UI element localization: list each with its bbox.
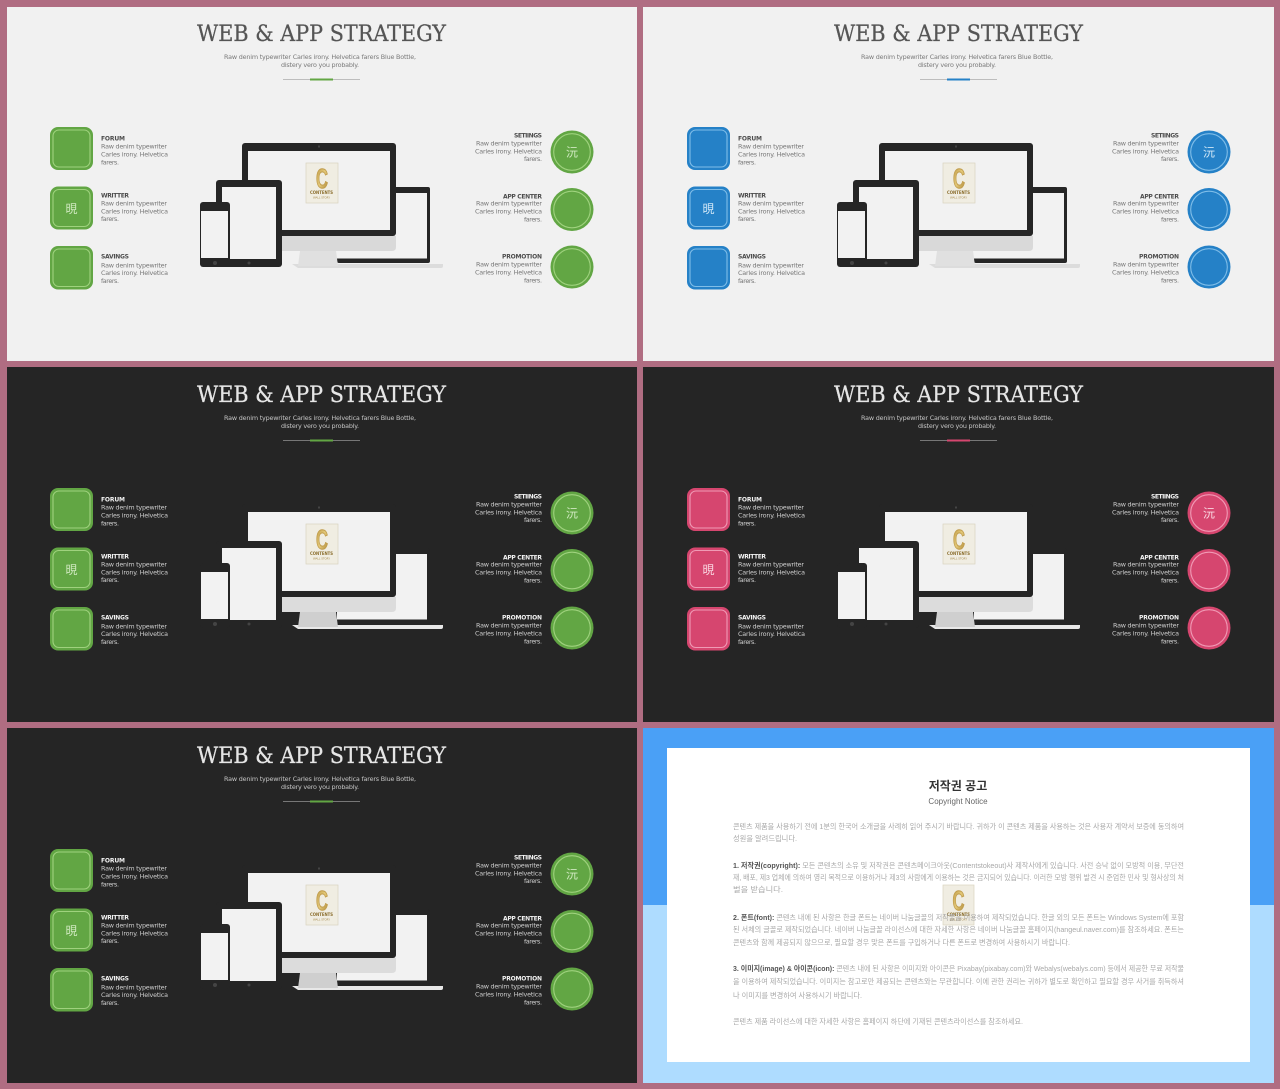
icon: settings: 沅 bbox=[1203, 506, 1215, 520]
subtitle bbox=[224, 775, 416, 791]
subtitle: distery vero you probably. bbox=[281, 422, 359, 430]
logo: C bbox=[316, 524, 328, 555]
logo bbox=[943, 163, 975, 203]
subtitle: distery vero you probably. bbox=[281, 783, 359, 791]
subtitle: distery vero you probably. bbox=[281, 61, 359, 69]
text: savings: SAVINGS bbox=[738, 614, 766, 622]
text: app center bbox=[475, 554, 542, 584]
logo: WALL STORY bbox=[313, 918, 330, 922]
text: forum: Carles irony. Helvetica bbox=[101, 872, 168, 880]
text: settings bbox=[475, 494, 542, 524]
text: writter: Raw denim typewriter bbox=[101, 922, 167, 930]
text: writter: Carles irony. Helvetica bbox=[101, 930, 168, 938]
heading: WEB & APP STRATEGY bbox=[197, 22, 446, 47]
text: savings: Carles irony. Helvetica bbox=[101, 991, 168, 999]
logo: WALL STORY bbox=[950, 556, 967, 560]
text: promotion bbox=[475, 976, 542, 1006]
icon: settings bbox=[1188, 130, 1230, 174]
subtitle: Raw denim typewriter Carles irony. Helvetica farers Blue Bottle, bbox=[861, 53, 1053, 61]
text: forum: farers. bbox=[738, 520, 756, 528]
device mockup bbox=[200, 504, 443, 629]
section: copyright: 재, 배포, 제3 업체에 의하여 영리 목적으로 이용하거나 제3의 사람에게 이용하는 것은 금지되어 있습니다. 이러한 모방 행위 발견 시 준엄한 민사 및 형사상의 처 bbox=[733, 873, 1184, 882]
text: savings bbox=[101, 614, 168, 646]
text: savings: farers. bbox=[101, 638, 119, 646]
icon: promotion bbox=[1188, 606, 1230, 650]
icon: writter: 晛 bbox=[65, 563, 78, 577]
section: image and icon: 3. 이미지(image) & 아이콘(icon): 콘텐츠 내에 된 사항은 이미지와 아이콘은 Pixabay(pixabay.com)와 Webalys(webalys.com) 등에서 제공한 무료 저작물 bbox=[733, 964, 1184, 973]
text: app center: APP CENTER bbox=[503, 916, 542, 922]
logo: C bbox=[953, 524, 965, 555]
text: promotion: PROMOTION bbox=[1139, 614, 1179, 622]
text: settings bbox=[1112, 494, 1179, 524]
text: settings: SETIINGS bbox=[1151, 132, 1179, 140]
heading: WEB & APP STRATEGY bbox=[834, 22, 1083, 47]
text: savings: farers. bbox=[101, 277, 119, 285]
subtitle bbox=[861, 53, 1053, 69]
text: writter: farers. bbox=[101, 215, 119, 223]
text: savings bbox=[101, 254, 168, 285]
text: writter: farers. bbox=[738, 215, 756, 223]
text: promotion bbox=[1112, 614, 1179, 646]
divider accent bbox=[920, 440, 997, 442]
section: image and icon: 나 이미지를 변경하여 사용하시기 바랍니다. bbox=[733, 991, 862, 1000]
logo watermark: CONTENTS bbox=[947, 912, 970, 918]
text: app center: APP CENTER bbox=[1140, 194, 1179, 200]
text: writter: WRITTER bbox=[101, 914, 129, 922]
icon: writter bbox=[50, 548, 93, 590]
icon: writter bbox=[50, 908, 93, 952]
text: app center: farers. bbox=[524, 576, 542, 584]
text: settings: farers. bbox=[1161, 155, 1179, 163]
text: app center: APP CENTER bbox=[503, 194, 542, 200]
text: forum: Raw denim typewriter bbox=[101, 142, 167, 150]
divider accent bbox=[283, 440, 360, 442]
panel: dark green slide bbox=[7, 367, 637, 722]
text: settings: Raw denim typewriter bbox=[1113, 500, 1179, 508]
text: promotion: PROMOTION bbox=[502, 254, 542, 260]
subtitle: distery vero you probably. bbox=[918, 61, 996, 69]
text: writter bbox=[738, 192, 805, 223]
text: promotion: Carles irony. Helvetica bbox=[475, 990, 542, 998]
notice title: 저작권 공고 bbox=[929, 778, 987, 793]
text: promotion: Carles irony. Helvetica bbox=[475, 630, 542, 638]
text: app center: APP CENTER bbox=[1140, 554, 1179, 562]
text: promotion bbox=[475, 614, 542, 646]
logo bbox=[306, 524, 338, 564]
icon: settings bbox=[550, 852, 594, 896]
closing note: 콘텐츠 제품 라이선스에 대한 자세한 사항은 홈페이지 하단에 기재된 콘텐츠라이선스를 참조하세요. bbox=[733, 1017, 1023, 1026]
icon: writter: 晛 bbox=[65, 924, 78, 938]
device mockup bbox=[200, 143, 443, 268]
text: writter: Raw denim typewriter bbox=[738, 200, 804, 208]
text: writter: WRITTER bbox=[101, 554, 129, 560]
icon: savings bbox=[687, 607, 730, 650]
text: settings: Raw denim typewriter bbox=[476, 862, 542, 870]
text: forum bbox=[101, 858, 168, 888]
text: forum: Raw denim typewriter bbox=[738, 142, 804, 150]
text: writter: Raw denim typewriter bbox=[101, 560, 167, 568]
icon: forum bbox=[50, 488, 93, 531]
text: forum: Raw denim typewriter bbox=[101, 864, 167, 872]
intro paragraph bbox=[733, 822, 1184, 843]
text: writter: Carles irony. Helvetica bbox=[101, 568, 168, 576]
text: forum: FORUM bbox=[738, 496, 762, 504]
section: font: 콘텐츠와 함께 제공되지 않으므로, 필요할 경우 맞은 폰트를 구입하거나 다른 폰트로 변경하여 사용하시기 바랍니다. bbox=[733, 938, 1070, 947]
text: forum: farers. bbox=[738, 158, 756, 166]
text: savings: farers. bbox=[738, 277, 756, 285]
icon: savings bbox=[687, 246, 730, 290]
text: app center: Carles irony. Helvetica bbox=[475, 208, 542, 216]
device mockup bbox=[837, 504, 1080, 629]
text: savings: Raw denim typewriter bbox=[101, 622, 167, 630]
text: writter bbox=[101, 914, 168, 945]
text: app center: farers. bbox=[524, 938, 542, 946]
text: forum: farers. bbox=[101, 158, 119, 166]
panel: copyright notice bbox=[643, 728, 1274, 1083]
text: promotion: Carles irony. Helvetica bbox=[1112, 630, 1179, 638]
text: promotion: Raw denim typewriter bbox=[476, 622, 542, 630]
device mockup bbox=[837, 143, 1080, 268]
text: settings: SETIINGS bbox=[1151, 494, 1179, 500]
text: settings bbox=[475, 132, 542, 163]
text: promotion: farers. bbox=[524, 638, 542, 646]
text: app center: Raw denim typewriter bbox=[476, 560, 542, 568]
subtitle bbox=[224, 53, 416, 69]
notice card bbox=[667, 748, 1250, 1062]
text: savings: farers. bbox=[101, 999, 119, 1007]
text: promotion: Raw denim typewriter bbox=[476, 260, 542, 268]
text: settings: farers. bbox=[524, 877, 542, 885]
section: image and icon bbox=[733, 964, 1184, 1000]
panel: light green slide bbox=[7, 7, 637, 361]
text: app center: farers. bbox=[1161, 576, 1179, 584]
text: settings bbox=[475, 854, 542, 885]
text: app center: Carles irony. Helvetica bbox=[475, 568, 542, 576]
text: forum: Raw denim typewriter bbox=[101, 504, 167, 512]
icon: app center bbox=[1188, 188, 1230, 231]
text: app center bbox=[475, 916, 542, 946]
text: app center: APP CENTER bbox=[503, 554, 542, 562]
text: app center: farers. bbox=[1161, 216, 1179, 224]
icon: app center bbox=[1188, 549, 1230, 592]
icon: writter: 晛 bbox=[65, 202, 78, 216]
logo bbox=[306, 885, 338, 925]
text: savings: Raw denim typewriter bbox=[101, 984, 167, 992]
logo watermark bbox=[943, 885, 974, 925]
icon: promotion bbox=[1188, 246, 1230, 288]
icon: settings: 沅 bbox=[566, 868, 578, 882]
text: forum bbox=[738, 136, 805, 166]
section: font: 2. 폰트(font): 콘텐츠 내에 된 사항은 한글 폰트는 네이버 나눔글꼴의 저작물을 이용하여 제작되었습니다. 한글 외의 모든 폰트는 Windows System에 포함 bbox=[733, 913, 1184, 922]
logo: C bbox=[316, 885, 328, 916]
text: writter: Carles irony. Helvetica bbox=[738, 568, 805, 576]
section: copyright bbox=[733, 861, 1184, 894]
text: savings: Carles irony. Helvetica bbox=[738, 269, 805, 277]
section: font bbox=[733, 913, 1184, 947]
notice subtitle: Copyright Notice bbox=[928, 797, 988, 806]
icon: settings bbox=[550, 492, 594, 534]
icon: writter bbox=[687, 186, 730, 230]
text: writter: WRITTER bbox=[738, 554, 766, 560]
text: promotion: PROMOTION bbox=[502, 614, 542, 622]
divider accent bbox=[283, 78, 360, 80]
text: app center: Carles irony. Helvetica bbox=[475, 930, 542, 938]
text: app center: Raw denim typewriter bbox=[1113, 560, 1179, 568]
text: savings bbox=[738, 614, 805, 646]
text: promotion: Raw denim typewriter bbox=[476, 982, 542, 990]
intro paragraph: 콘텐츠 제품을 사용하기 전에 1분의 한국어 소개글을 사례히 읽어 주시기 바랍니다. 귀하가 이 콘텐츠 제품을 사용하는 것은 사용자 계약서 보증에 동의하여 bbox=[733, 822, 1184, 831]
icon: app center bbox=[550, 549, 594, 592]
logo watermark: WALL STORY bbox=[950, 918, 967, 922]
subtitle: Raw denim typewriter Carles irony. Helvetica farers Blue Bottle, bbox=[224, 414, 416, 422]
text: settings: Carles irony. Helvetica bbox=[475, 508, 542, 516]
subtitle bbox=[861, 414, 1053, 430]
text: savings: Raw denim typewriter bbox=[738, 262, 804, 270]
logo watermark: C bbox=[952, 885, 964, 916]
text: writter: farers. bbox=[101, 576, 119, 584]
text: writter: Raw denim typewriter bbox=[101, 200, 167, 208]
logo: C bbox=[316, 163, 328, 194]
divider accent bbox=[920, 78, 997, 80]
text: savings: Carles irony. Helvetica bbox=[101, 630, 168, 638]
text: promotion bbox=[1112, 254, 1179, 284]
text: forum bbox=[101, 136, 168, 166]
icon: savings bbox=[50, 246, 93, 290]
icon: promotion bbox=[550, 246, 594, 288]
subtitle: Raw denim typewriter Carles irony. Helvetica farers Blue Bottle, bbox=[224, 53, 416, 61]
section: font: 된 서체의 글꼴로 제작되었습니다. 네이버 나눔글꼴 라이선스에 대한 자세한 사항은 네이버 나눔글꼴 홈페이지(hangeul.naver.com)를 참조하세요. 폰트는 bbox=[733, 925, 1184, 934]
text: settings: Carles irony. Helvetica bbox=[1112, 508, 1179, 516]
text: app center: Raw denim typewriter bbox=[476, 200, 542, 208]
text: app center: Raw denim typewriter bbox=[1113, 200, 1179, 208]
text: forum: Carles irony. Helvetica bbox=[101, 512, 168, 520]
text: forum: Carles irony. Helvetica bbox=[738, 150, 805, 158]
text: promotion: Raw denim typewriter bbox=[1113, 622, 1179, 630]
text: settings: SETIINGS bbox=[514, 132, 542, 140]
text: promotion: farers. bbox=[1161, 276, 1179, 284]
icon: settings: 沅 bbox=[566, 146, 578, 160]
icon: writter bbox=[50, 186, 93, 230]
text: forum: Carles irony. Helvetica bbox=[738, 512, 805, 520]
text: app center bbox=[1112, 194, 1179, 224]
text: settings: SETIINGS bbox=[514, 494, 542, 500]
heading: WEB & APP STRATEGY bbox=[834, 383, 1083, 408]
text: forum bbox=[738, 496, 805, 528]
text: settings: Raw denim typewriter bbox=[476, 140, 542, 148]
text: savings: SAVINGS bbox=[101, 976, 129, 982]
text: promotion: PROMOTION bbox=[1139, 254, 1179, 260]
text: forum: farers. bbox=[101, 880, 119, 888]
text: savings bbox=[738, 254, 805, 285]
text: savings: SAVINGS bbox=[101, 614, 129, 622]
device mockup bbox=[200, 865, 443, 990]
text: app center: Raw denim typewriter bbox=[476, 922, 542, 930]
icon: app center bbox=[550, 188, 594, 231]
text: settings: farers. bbox=[524, 155, 542, 163]
text: settings: farers. bbox=[524, 516, 542, 524]
text: forum: farers. bbox=[101, 520, 119, 528]
text: app center: Carles irony. Helvetica bbox=[1112, 208, 1179, 216]
logo: WALL STORY bbox=[313, 196, 330, 200]
text: savings: Carles irony. Helvetica bbox=[101, 269, 168, 277]
icon: forum bbox=[687, 127, 730, 170]
text: savings: Raw denim typewriter bbox=[738, 622, 804, 630]
panel: dark pink slide bbox=[643, 367, 1274, 722]
icon: promotion bbox=[550, 968, 594, 1010]
icon: writter bbox=[687, 548, 730, 590]
text: savings bbox=[101, 976, 168, 1007]
text: savings: Carles irony. Helvetica bbox=[738, 630, 805, 638]
icon: savings bbox=[50, 607, 93, 650]
text: writter: Carles irony. Helvetica bbox=[101, 208, 168, 216]
logo bbox=[943, 524, 975, 564]
text: settings: Carles irony. Helvetica bbox=[475, 148, 542, 156]
text: writter: WRITTER bbox=[101, 192, 129, 200]
icon: writter: 晛 bbox=[702, 563, 715, 577]
section: copyright: 1. 저작권(copyright): 모든 콘텐츠의 소유 및 저작권은 콘텐츠메이크아웃(Contentstokeout)사 제작사에게 있습니다. 사전 승낙 없이 모방적 이용, 무단전 bbox=[733, 861, 1184, 870]
text: writter: Carles irony. Helvetica bbox=[738, 208, 805, 216]
subtitle: distery vero you probably. bbox=[918, 422, 996, 430]
text: settings: Raw denim typewriter bbox=[1113, 140, 1179, 148]
subtitle bbox=[224, 414, 416, 430]
icon: forum bbox=[50, 849, 93, 892]
text: settings bbox=[1112, 132, 1179, 163]
panel: second dark green slide bbox=[7, 728, 637, 1083]
text: settings: Carles irony. Helvetica bbox=[1112, 148, 1179, 156]
text: writter: WRITTER bbox=[738, 192, 766, 200]
text: settings: farers. bbox=[1161, 516, 1179, 524]
divider accent bbox=[283, 800, 360, 802]
text: savings: Raw denim typewriter bbox=[101, 262, 167, 270]
logo: CONTENTS bbox=[310, 912, 333, 918]
logo: CONTENTS bbox=[947, 551, 970, 557]
text: writter: Raw denim typewriter bbox=[738, 560, 804, 568]
text: forum: FORUM bbox=[101, 858, 125, 864]
text: savings: farers. bbox=[738, 638, 756, 646]
heading: WEB & APP STRATEGY bbox=[197, 383, 446, 408]
panel: light blue slide bbox=[643, 7, 1274, 361]
text: forum bbox=[101, 496, 168, 528]
text: settings: Raw denim typewriter bbox=[476, 500, 542, 508]
icon: settings: 沅 bbox=[1203, 146, 1215, 160]
text: promotion: Carles irony. Helvetica bbox=[1112, 268, 1179, 276]
icon: settings bbox=[1188, 492, 1230, 534]
text: app center: Carles irony. Helvetica bbox=[1112, 568, 1179, 576]
icon: forum bbox=[687, 488, 730, 531]
icon: app center bbox=[550, 910, 594, 953]
icon: settings bbox=[550, 130, 594, 174]
logo: CONTENTS bbox=[310, 551, 333, 557]
icon: writter: 晛 bbox=[702, 202, 715, 216]
text: forum: FORUM bbox=[101, 496, 125, 504]
icon: settings: 沅 bbox=[566, 506, 578, 520]
text: forum: FORUM bbox=[738, 136, 762, 142]
text: promotion: Carles irony. Helvetica bbox=[475, 268, 542, 276]
text: promotion: farers. bbox=[524, 998, 542, 1006]
logo bbox=[306, 163, 338, 203]
icon: promotion bbox=[550, 606, 594, 650]
text: app center bbox=[475, 194, 542, 224]
section: image and icon: 을 이용하여 제작되었습니다. 이미지는 참고로만 제공되는 콘텐츠와는 무관합니다. 이에 관한 권리는 귀하가 별도로 확인하고 필요할 경우 사거를 취득하셔 bbox=[733, 977, 1184, 986]
text: savings: SAVINGS bbox=[738, 254, 766, 260]
logo: C bbox=[953, 163, 965, 194]
text: forum: Raw denim typewriter bbox=[738, 504, 804, 512]
logo: CONTENTS bbox=[947, 190, 970, 196]
text: promotion bbox=[475, 254, 542, 284]
text: promotion: farers. bbox=[524, 276, 542, 284]
text: writter: farers. bbox=[101, 937, 119, 945]
section: copyright: 벌을 받습니다. bbox=[733, 885, 783, 894]
subtitle: Raw denim typewriter Carles irony. Helvetica farers Blue Bottle, bbox=[861, 414, 1053, 422]
text: forum: FORUM bbox=[101, 136, 125, 142]
logo: WALL STORY bbox=[313, 556, 330, 560]
text: savings: SAVINGS bbox=[101, 254, 129, 260]
text: settings: Carles irony. Helvetica bbox=[475, 870, 542, 878]
text: forum: Carles irony. Helvetica bbox=[101, 150, 168, 158]
icon: savings bbox=[50, 968, 93, 1012]
text: app center: farers. bbox=[524, 216, 542, 224]
text: promotion: farers. bbox=[1161, 638, 1179, 646]
subtitle: Raw denim typewriter Carles irony. Helvetica farers Blue Bottle, bbox=[224, 775, 416, 783]
logo: WALL STORY bbox=[950, 196, 967, 200]
text: settings: SETIINGS bbox=[514, 854, 542, 862]
intro paragraph: 성원을 알려드립니다. bbox=[733, 834, 797, 843]
text: writter bbox=[101, 192, 168, 223]
text: writter bbox=[738, 554, 805, 584]
text: promotion: Raw denim typewriter bbox=[1113, 260, 1179, 268]
logo: CONTENTS bbox=[310, 190, 333, 196]
text: writter: farers. bbox=[738, 576, 756, 584]
heading: WEB & APP STRATEGY bbox=[197, 744, 446, 769]
icon: forum bbox=[50, 127, 93, 170]
text: app center bbox=[1112, 554, 1179, 584]
text: writter bbox=[101, 554, 168, 584]
text: promotion: PROMOTION bbox=[502, 976, 542, 982]
